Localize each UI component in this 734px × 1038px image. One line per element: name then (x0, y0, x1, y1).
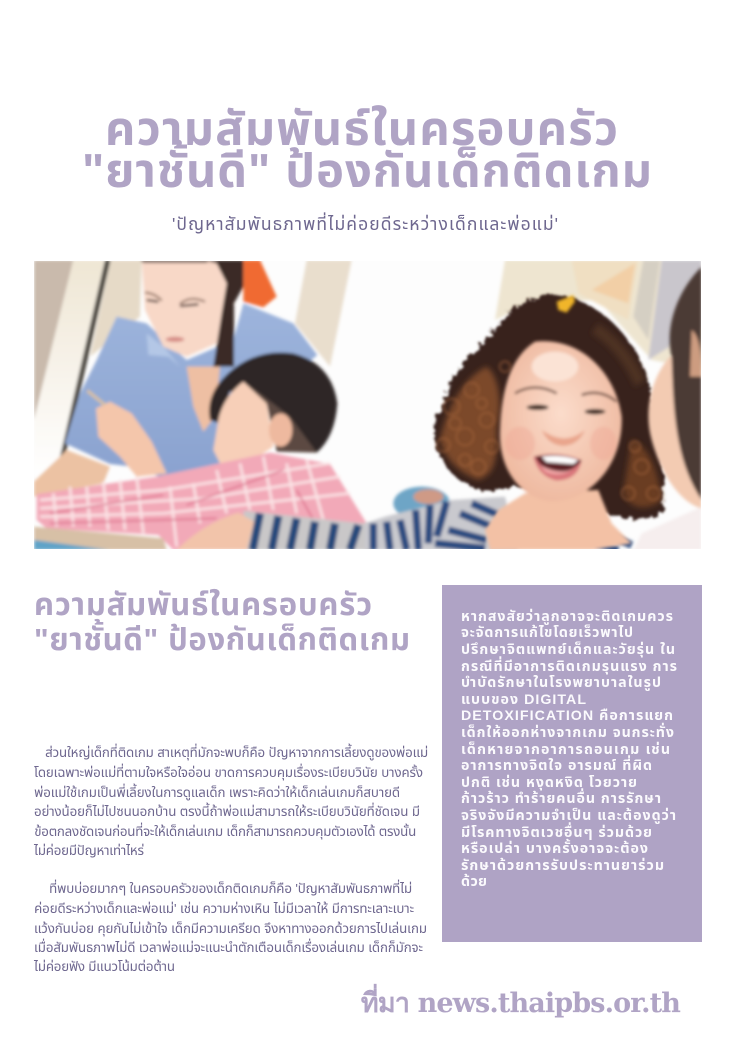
subtitle: 'ปัญหาสัมพันธภาพที่ไม่ค่อยดีระหว่างเด็กและพ่อแม่' (172, 212, 558, 234)
body paragraph 2: ที่พบบ่อยมากๆ ในครอบครัวของเด็กติดเกมก็คือ 'ปัญหาสัมพันธภาพที่ไม่ (49, 879, 412, 896)
body paragraph 1: พ่อแม่ใช้เกมเป็นพี่เลี้ยงในการดูแลเด็ก เพราะคิดว่าให้เด็กเล่นเกมก็สบายดี (34, 783, 400, 801)
source credit: ที่มา news.thaipbs.or.th (361, 983, 681, 1019)
body paragraph 2: ไม่ค่อยฟัง มีแนวโน้มต่อต้าน (33, 958, 175, 974)
photo left: mother and boy (34, 260, 370, 550)
panel: advice for parents: จะจัดการแก้ไขโดยเร็วพาไป (461, 625, 633, 641)
panel: advice for parents: มีโรคทางจิตเวชอื่นๆ ร่วมด้วย (461, 822, 652, 841)
panel: advice for parents: อาการทางจิตใจ อารมณ์ ที่ผิด (461, 755, 652, 774)
panel: advice for parents: ก้าวร้าว ทำร้ายคนอื่น การรักษา (461, 788, 661, 807)
panel: advice for parents: ปกติ เช่น หงุดหงิด โวยวาย (461, 774, 637, 791)
panel: advice for parents: เด็กให้ออกห่างจากเกม จนกระทั่ง (461, 722, 674, 741)
panel: advice for parents: แบบของ DIGITAL (461, 692, 586, 708)
title: "ยาชั้นดี" ป้องกันเด็กติดเกม (82, 140, 652, 197)
panel: advice for parents: ด้วย (461, 874, 487, 890)
body paragraph 1: ข้อตกลงชัดเจนก่อนที่จะให้เด็กเล่นเกม เด็กก็สามารถควบคุมตัวเองได้ ตรงนั้น (34, 822, 416, 840)
section heading (34, 587, 410, 657)
section heading: ความสัมพันธ์ในครอบครัว (34, 587, 372, 622)
body paragraph 1: ส่วนใหญ่เด็กที่ติดเกม สาเหตุที่มักจะพบก็คือ ปัญหาจากการเลี้ยงดูของพ่อแม่ (45, 743, 428, 761)
photo: mother, boy and smiling girl (34, 260, 702, 550)
body paragraph 1: โดยเฉพาะพ่อแม่ที่ตามใจหรือใจอ่อน ขาดการควบคุมเรื่องระเบียบวินัย บางครั้ง (34, 763, 423, 781)
panel: advice for parents (442, 585, 702, 942)
title (82, 102, 652, 197)
panel: advice for parents: บำบัดรักษาในโรงพยาบาลในรูป (461, 675, 661, 692)
photo right: smiling girl (365, 260, 702, 550)
panel: advice for parents: DETOXIFICATION คือการแยก (461, 708, 673, 724)
body paragraph 1: อย่างน้อยก็ไม่ไปซนนอกบ้าน ตรงนี้ถ้าพ่อแม่สามารถให้ระเบียบวินัยที่ชัดเจน มี (34, 802, 420, 819)
panel: advice for parents: หรือเปล่า บางครั้งอาจจะต้อง (461, 838, 648, 857)
body paragraph 1 (33, 743, 428, 858)
body paragraph 2: ค่อยดีระหว่างเด็กและพ่อแม่' เช่น ความห่างเหิน ไม่มีเวลาให้ มีการทะเลาะเบาะ (34, 900, 414, 916)
body paragraph 1: ไม่ค่อยมีปัญหาเท่าไหร่ (33, 842, 144, 858)
panel: advice for parents: ปรึกษาจิตแพทย์เด็กและวัยรุ่น ใน (461, 641, 675, 658)
body paragraph 2: แว้งกันบ่อย คุยกันไม่เข้าใจ เด็กมีความเครียด จึงหาทางออกด้วยการไปเล่นเกม (34, 920, 427, 937)
panel: advice for parents: จริงจังมีความจำเป็น และต้องดูว่า (461, 807, 676, 825)
section heading: "ยาชั้นดี" ป้องกันเด็กติดเกม (34, 618, 410, 657)
panel: advice for parents: หากสงสัยว่าลูกอาจจะติดเกมควร (461, 608, 673, 626)
panel: advice for parents: รักษาด้วยการรับประทานยาร่วม (461, 857, 664, 874)
panel: advice for parents: เด็กหายจากอาการถอนเกม เช่น (461, 741, 670, 758)
body paragraph 2: เมื่อสัมพันธภาพไม่ดี เวลาพ่อแม่จะแนะนำตักเตือนเด็กเรื่องเล่นเกม เด็กก็มักจะ (34, 938, 423, 955)
title: ความสัมพันธ์ในครอบครัว (105, 102, 618, 155)
panel: advice for parents: กรณีที่มีอาการติดเกมรุนแรง การ (461, 656, 677, 675)
body paragraph 2 (33, 879, 427, 974)
